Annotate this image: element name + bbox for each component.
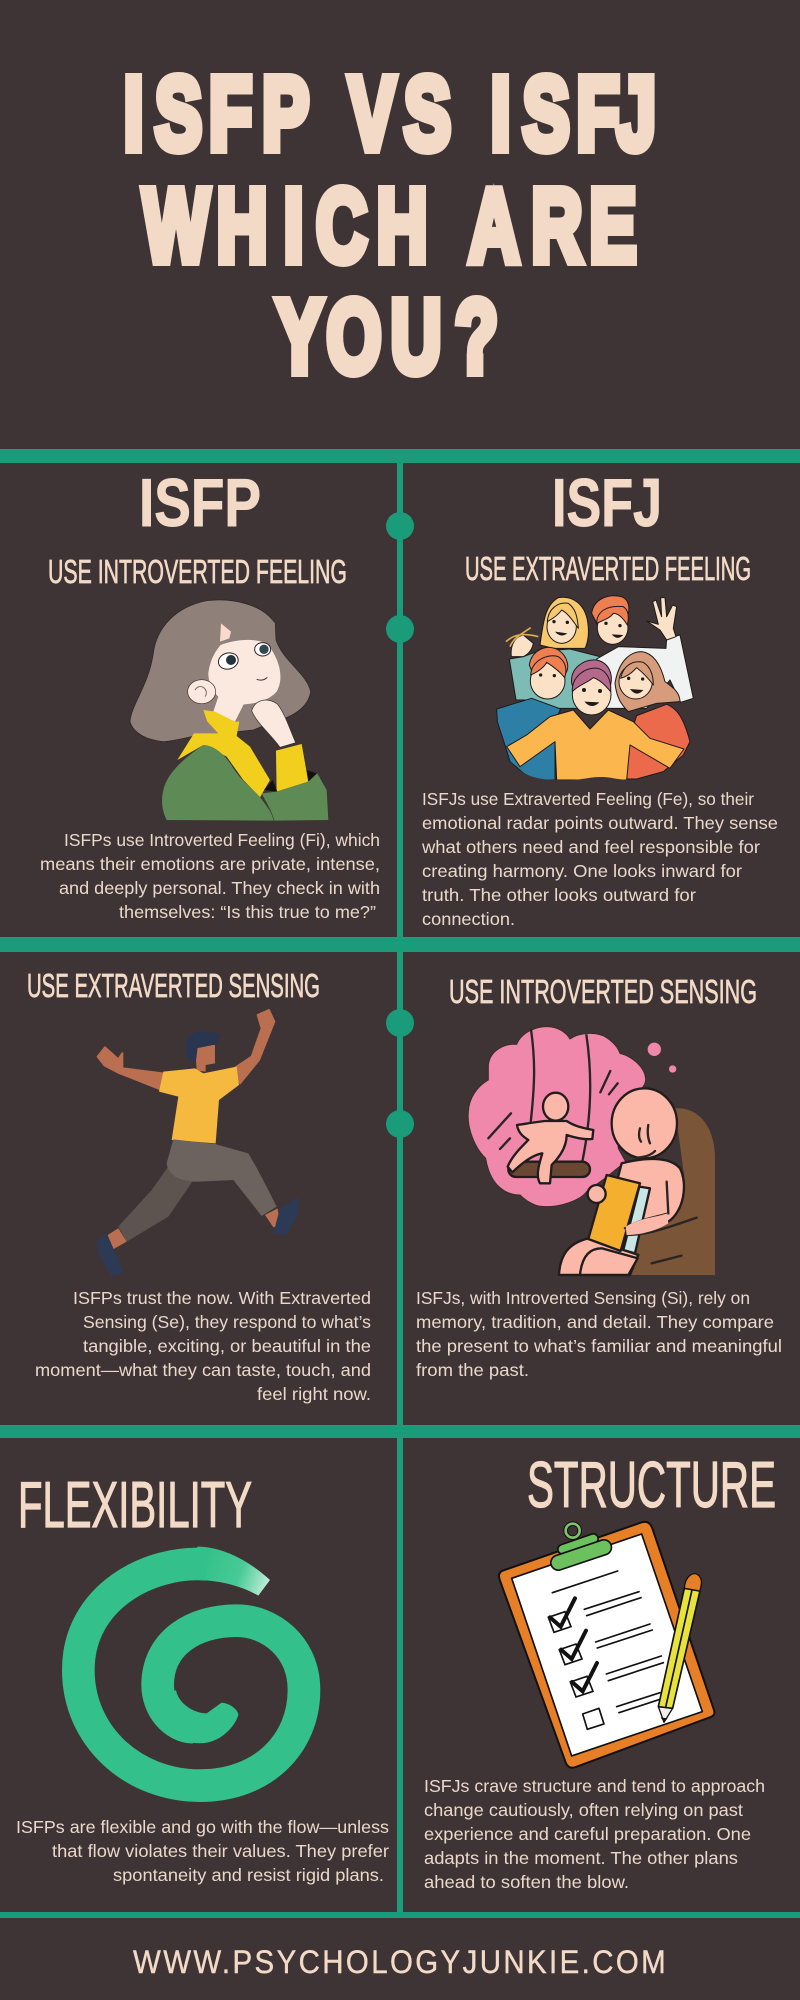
body text xyxy=(421,789,778,929)
footer website: WWW.PSYCHOLOGYJUNKIE.COM xyxy=(133,1944,666,1980)
panel: flexibility xyxy=(16,1468,389,1885)
body text: experience and careful preparation. One xyxy=(424,1824,751,1844)
title: YOU? xyxy=(276,278,498,394)
panel: ISFP introverted feeling xyxy=(40,465,380,922)
body text: ISFPs are flexible and go with the flow—unless xyxy=(16,1817,389,1837)
body text: adapts in the moment. The other plans xyxy=(424,1848,738,1868)
body text xyxy=(416,1288,782,1380)
body text: emotional radar points outward. They sense xyxy=(422,813,778,833)
body text: ahead to soften the blow. xyxy=(424,1872,629,1892)
body text: from the past. xyxy=(416,1360,529,1380)
body text: change cautiously, often relying on past xyxy=(424,1800,743,1820)
body text: the present to what’s familiar and meaningful xyxy=(416,1336,782,1356)
panel: ISFJ introverted sensing xyxy=(416,973,782,1380)
body text: memory, tradition, and detail. They compare xyxy=(416,1312,774,1332)
illustration: clipboard checklist xyxy=(499,1522,714,1768)
illustration: person remembering swing xyxy=(468,1027,715,1275)
body text: spontaneity and resist rigid plans. xyxy=(113,1865,384,1885)
body text xyxy=(35,1288,371,1404)
body text: creating harmony. One looks inward for xyxy=(422,861,742,881)
body text: and deeply personal. They check in with xyxy=(59,878,380,898)
title xyxy=(124,55,656,394)
panel: ISFP extraverted sensing xyxy=(27,967,371,1404)
body text: ISFPs use Introverted Feeling (Fi), which xyxy=(64,830,380,850)
body text: ISFJs, with Introverted Sensing (Si), rely on xyxy=(416,1288,750,1308)
body text: that flow violates their values. They prefer xyxy=(52,1841,389,1861)
illustration: green paint spiral xyxy=(78,1547,304,1786)
illustration: thinking girl xyxy=(130,600,328,821)
heading: ISFJ: ISFJ xyxy=(552,465,662,541)
heading: ISFP: ISFP xyxy=(139,465,261,541)
body text: ISFJs use Extraverted Feeling (Fe), so their xyxy=(422,789,754,809)
body text: tangible, exciting, or beautiful in the xyxy=(83,1336,371,1356)
body text: connection. xyxy=(422,909,515,929)
body text xyxy=(40,830,380,922)
panel: ISFJ extraverted feeling xyxy=(421,465,778,929)
body text: ISFJs crave structure and tend to approach xyxy=(424,1776,765,1796)
heading: flexibility: FLEXIBILITY xyxy=(18,1468,252,1541)
subheading: extraverted sensing: USE EXTRAVERTED SENSING xyxy=(27,967,320,1004)
illustration: group of friends xyxy=(497,596,693,785)
panel: structure xyxy=(424,1448,776,1892)
body text: what others need and feel responsible for xyxy=(421,837,760,857)
title: ISFP VS ISFJ xyxy=(124,55,656,171)
body text xyxy=(16,1817,389,1885)
body text: moment—what they can taste, touch, and xyxy=(35,1360,371,1380)
green layout frame xyxy=(0,449,800,1918)
subheading: introverted feeling: USE INTROVERTED FEELING xyxy=(48,553,347,590)
body text: Sensing (Se), they respond to what’s xyxy=(83,1312,371,1332)
body text xyxy=(424,1776,765,1892)
body text: themselves: “Is this true to me?” xyxy=(119,902,376,922)
body text: feel right now. xyxy=(257,1384,371,1404)
illustration: jumping man xyxy=(97,1010,298,1276)
title: WHICH ARE xyxy=(143,167,636,283)
body text: means their emotions are private, intense, xyxy=(40,854,380,874)
body text: truth. The other looks outward for xyxy=(422,885,696,905)
body text: ISFPs trust the now. With Extraverted xyxy=(73,1288,371,1308)
